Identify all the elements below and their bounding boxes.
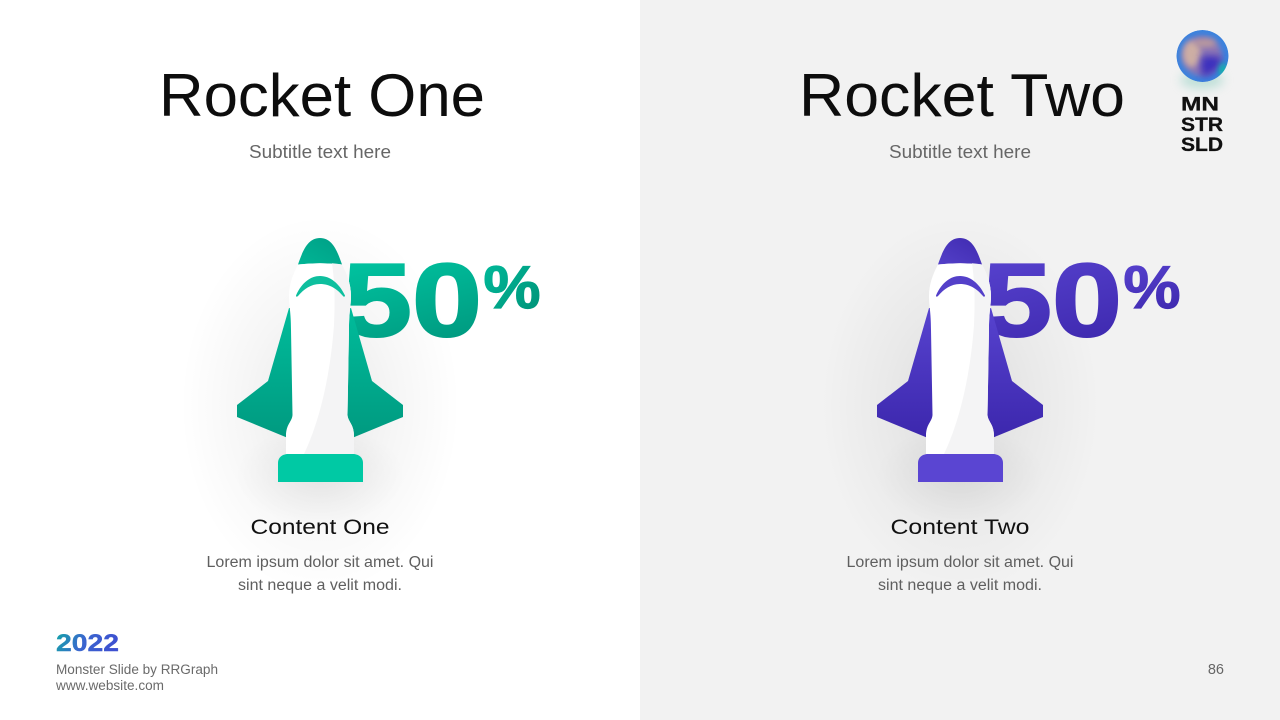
footer: year and credits xyxy=(55,630,218,693)
logo: MN STR SLD xyxy=(1176,30,1228,156)
rocket shadow xyxy=(180,215,460,595)
body text xyxy=(846,554,1074,594)
subtitle: Subtitle text here xyxy=(889,141,1031,162)
percentage: 50%: 50 xyxy=(982,243,1122,359)
page number: 86 xyxy=(1208,662,1224,678)
body text xyxy=(206,554,434,594)
panel: Rocket Two xyxy=(799,62,1180,595)
logo wordmark: STR xyxy=(1181,114,1223,136)
percentage: 50% xyxy=(342,243,540,359)
percentage: 50%: 50 xyxy=(342,243,482,359)
heading: Rocket Two: Rocket Two xyxy=(799,62,1125,129)
body text: sint neque a velit modi. xyxy=(238,577,402,594)
panel: Rocket One background xyxy=(0,0,640,720)
website: www.website.com xyxy=(55,678,164,693)
rocket shadow xyxy=(820,215,1100,595)
credit line: Monster Slide by RRGraph xyxy=(56,662,218,677)
subtitle: Subtitle text here xyxy=(249,141,391,162)
logo wordmark: SLD xyxy=(1181,134,1223,156)
logo wordmark: MN xyxy=(1181,94,1219,116)
body text: Lorem ipsum dolor sit amet. Qui xyxy=(206,554,434,571)
body text: Lorem ipsum dolor sit amet. Qui xyxy=(846,554,1074,571)
body text: sint neque a velit modi. xyxy=(878,577,1042,594)
label: Content One: Content One xyxy=(250,516,390,539)
percentage: 50%: % xyxy=(1124,254,1180,321)
panel: Rocket Two background xyxy=(640,0,1280,720)
icon: teal rocket xyxy=(237,238,403,482)
year 2022: 2022 xyxy=(56,630,119,657)
label: Content Two: Content Two xyxy=(890,516,1030,539)
icon: gradient sphere xyxy=(1176,30,1228,82)
panel: Rocket One xyxy=(159,62,540,595)
percentage: 50% xyxy=(982,243,1180,359)
icon: purple rocket xyxy=(877,238,1043,482)
logo shadow xyxy=(1180,71,1224,89)
percentage: 50%: % xyxy=(484,254,540,321)
heading: Rocket One: Rocket One xyxy=(159,62,485,129)
logo wordmark xyxy=(1181,94,1223,156)
